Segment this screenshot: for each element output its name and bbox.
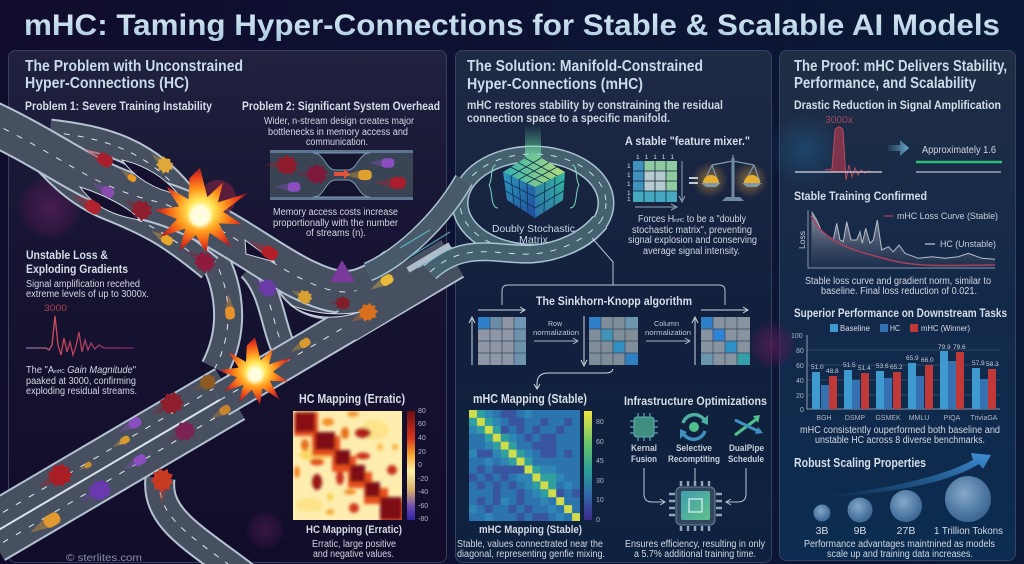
colorbar: mHC: 30 — [596, 478, 604, 485]
caption: mHC mapping: Stable, values connectrated near the — [457, 539, 603, 550]
text: efficiency: Ensures efficiency, resulting in only — [625, 539, 765, 550]
label: selective recomptiting: Recomptiting — [668, 454, 720, 465]
labels: scale: 3B — [816, 525, 828, 537]
colorbar: HC: 20 — [418, 449, 426, 456]
colorbar: HC: -80 — [418, 516, 428, 523]
heading: proof: Performance, and Scalability — [794, 75, 976, 92]
heatmap title: HC: HC Mapping (Erratic) — [299, 392, 405, 406]
colorbar: HC: -40 — [418, 489, 428, 496]
colorbar: HC — [407, 408, 428, 523]
label: doubly stochastic matrix: Doubly Stochastic — [492, 223, 575, 235]
subheading: stable training: Stable Training Confirmed — [794, 189, 927, 203]
text: overhead description: bottlenecks in memory access and — [268, 127, 408, 138]
chart: benchmark bars: 100 — [791, 333, 803, 340]
text: outperformed: mHC consistently ouperformed both baseline and — [800, 425, 1000, 436]
chart: benchmark bars: 58.3 — [986, 361, 999, 368]
chart: benchmark bars: 79.9 — [938, 344, 951, 351]
text: forces matrix: signal explosion and conserving — [628, 235, 757, 246]
explosion upper — [154, 168, 248, 254]
arrow: scaling trend — [818, 453, 991, 497]
road: ring entry — [430, 222, 600, 272]
chart: loss curve: mHC Loss Curve (Stable) — [897, 211, 998, 222]
chart: loss curve: Loss — [797, 231, 807, 249]
label: dualpipe schedule: DualPipe — [729, 443, 764, 454]
text: efficiency: a 5.7% additional training time. — [634, 549, 756, 560]
chart: signal before: 3000x — [825, 115, 853, 126]
caption: mHC mapping: diagonal, representing genfie mixing. — [457, 549, 605, 560]
chart: benchmark bars: 40 — [796, 378, 804, 385]
text: forces matrix: average signal intensity. — [643, 246, 740, 257]
chart: benchmark bars: PIQA — [944, 415, 961, 422]
label: column normalization — [645, 319, 691, 344]
colorbar: mHC: 10 — [596, 497, 604, 504]
text: scaling — [804, 539, 995, 560]
caption: HC mapping: HC Mapping (Erratic) — [306, 524, 402, 536]
icon: central chip — [669, 481, 722, 531]
colorbar: HC: 60 — [418, 421, 426, 428]
text: outperformed — [800, 425, 1000, 446]
chart: loss curve: HC (Unstable) — [940, 239, 996, 250]
road: sweeping arc — [285, 285, 395, 310]
glow: blue orb proof panel — [767, 112, 843, 188]
colorbar: mHC: 80 — [596, 419, 604, 426]
matrix: column normalized — [701, 317, 750, 365]
label: kernal fusion: Kernal — [631, 443, 657, 454]
heading: proof — [794, 58, 1007, 92]
colorbar: HC: 40 — [418, 435, 426, 442]
colorbar: mHC: 0 — [596, 517, 600, 524]
diagram: stochastic matrix: 1 — [627, 181, 631, 188]
watermark: © sterlites.com — [66, 553, 142, 564]
label: selective recomptiting: Selective — [676, 443, 712, 454]
road: lower ramp — [25, 138, 210, 268]
heading: problem — [25, 58, 243, 92]
chart: loss curve — [797, 210, 998, 268]
subheading: unstable loss: Unstable Loss & — [26, 248, 108, 262]
heading: infrastructure: Infrastructure Optimizations — [624, 394, 767, 408]
label: selective recomptiting — [668, 443, 720, 465]
bracket: sinkhorn connector — [502, 238, 725, 305]
label: dualpipe schedule — [728, 443, 764, 465]
text: stable loss: baseline. Final loss reduction of 0.021. — [821, 286, 977, 297]
text: signal amplification — [26, 279, 149, 300]
labels: scale — [816, 525, 1003, 537]
diagram: stochastic matrix: 1 — [627, 172, 631, 179]
chart: benchmark bars: 80 — [796, 348, 804, 355]
labels: scale: 27B — [897, 525, 915, 537]
glow: purple orb left — [17, 175, 83, 241]
caption: HC mapping: Erratic, large positive — [312, 539, 396, 550]
chart: benchmark bars — [791, 333, 1000, 422]
chart: benchmark bars: BGH — [816, 415, 832, 422]
explosion lower — [219, 337, 293, 405]
text: stable loss — [805, 276, 991, 297]
chart: benchmark bars: 79.6 — [953, 344, 966, 351]
text: gain magnitude — [26, 365, 137, 397]
chart: benchmark bars: 51.0 — [811, 364, 824, 371]
caption: HC mapping: and negative values. — [313, 549, 394, 560]
chart: benchmark bars: TriviaGA — [971, 415, 998, 422]
label: kernal fusion: Fusion — [631, 454, 657, 465]
label: doubly stochastic matrix: Matrix — [519, 234, 549, 246]
text: stable loss: Stable loss curve and gradient norm, similar to — [805, 276, 991, 287]
text: forces matrix — [628, 214, 757, 257]
heading: solution — [467, 58, 703, 93]
diagram: stochastic matrix: 1 — [627, 163, 631, 170]
caption: HC mapping — [306, 524, 402, 560]
legend: benchmark bars — [830, 324, 970, 333]
heading: solution: Hyper-Connections (mHC) — [467, 76, 643, 93]
vehicles — [27, 143, 395, 538]
diagram: memory bottleneck — [265, 150, 413, 200]
arrows: to central chip — [644, 468, 746, 505]
label: row normalization: Row — [548, 319, 563, 328]
icon: selective recomputing — [680, 415, 708, 439]
heading: problem: Hyper-Connections (HC) — [25, 75, 189, 92]
road network — [0, 122, 606, 564]
diagram: stochastic matrix: 1 — [627, 196, 631, 203]
panel: proof — [780, 50, 1016, 560]
text: forces matrix: Forces HmHC to be a "doubly — [638, 214, 746, 225]
text: memory costs — [273, 207, 399, 239]
bubbles: scale — [814, 476, 991, 522]
chart: benchmark bars: 65.2 — [890, 364, 903, 371]
label: row normalization: normalization — [533, 328, 579, 337]
text: solution intro: mHC restores stability by constraining the residual — [467, 100, 723, 112]
text: efficiency — [625, 539, 765, 560]
text: scaling: scale up and training data increases. — [827, 549, 973, 560]
heading: solution: The Solution: Manifold-Constrained — [467, 58, 703, 75]
glow: purple orb boundary — [748, 321, 796, 369]
subheading: unstable loss — [26, 248, 128, 276]
subheading: problem 1: Problem 1: Severe Training Instability — [25, 99, 212, 113]
matrix: row normalized — [589, 317, 638, 365]
road: upper highway — [0, 122, 398, 292]
road: lower exit — [160, 478, 262, 564]
title: mHC: Taming Hyper-Connections for Stable & Scalable AI Models — [24, 9, 1000, 42]
colorbar: HC: -20 — [418, 476, 428, 483]
text: overhead description: communication. — [306, 137, 368, 148]
chart: benchmark bars: 53.6 — [876, 363, 889, 370]
subheading: feature mixer: A stable "feature mixer." — [625, 134, 750, 148]
text: memory costs: of streams (n). — [306, 228, 366, 239]
text: memory costs: Memory access costs increase — [273, 207, 398, 218]
caption: mHC mapping: mHC Mapping (Stable) — [479, 524, 582, 536]
matrix: initial — [478, 317, 526, 365]
legend: benchmark bars: HC — [890, 324, 900, 333]
chart: benchmark bars: 66.0 — [921, 357, 934, 364]
label: column normalization: normalization — [645, 328, 691, 337]
label: dualpipe schedule: Schedule — [728, 454, 764, 465]
colorbar: HC: -60 — [418, 503, 428, 510]
diagram: stochastic matrix: 11111 — [636, 154, 674, 161]
chart: signal before — [795, 115, 882, 180]
text: scaling: Performance advantages maintnined as models — [804, 539, 995, 550]
label: column normalization: Column — [654, 319, 679, 328]
chart: benchmark bars: 57.9 — [972, 360, 985, 367]
road: curved branch one — [205, 245, 228, 368]
chart: benchmark bars: 51.4 — [858, 365, 871, 372]
chart: benchmark bars: 60 — [796, 363, 804, 370]
chart: gain spike — [26, 303, 134, 355]
legend: benchmark bars: mHC (Winner) — [921, 324, 970, 333]
arrows: normalization axes — [469, 307, 748, 366]
diagram: stochastic matrix — [627, 154, 698, 210]
text: outperformed: unstable HC across 8 diverse benchmarks. — [815, 435, 985, 446]
text: overhead description: Wider, n-stream design creates major — [264, 116, 415, 127]
road: teal light streaks — [400, 230, 452, 268]
chart: benchmark bars: GSMEK — [875, 415, 901, 422]
road: curved branch two — [250, 268, 285, 352]
icon: balance scale — [692, 155, 768, 201]
heading: problem: The Problem with Unconstrained — [25, 58, 243, 75]
text: solution intro: connection space to a specific manifold. — [467, 113, 670, 125]
glow: purple orb centre — [245, 510, 285, 550]
labels: scale: 9B — [854, 525, 866, 537]
chart: signal after: Approximately 1.6 — [922, 145, 996, 156]
label: doubly stochastic matrix — [492, 223, 575, 246]
text: solution intro — [467, 100, 723, 125]
icon: matrix cube — [489, 125, 579, 218]
text: memory costs: proportionally with the number — [273, 218, 399, 229]
label: kernal fusion — [631, 443, 657, 465]
road: upper ramp — [50, 132, 190, 205]
subheading: signal amplification: Drastic Reduction in Signal Amplification — [794, 98, 1001, 112]
text: forces matrix: stochastic matrix", preventing — [632, 225, 752, 236]
colorbar: mHC — [584, 411, 604, 524]
road: approach band — [345, 258, 452, 322]
subheading: unstable loss: Exploding Gradients — [26, 262, 128, 276]
chart: benchmark bars: 65.9 — [906, 355, 919, 362]
subheading: problem 2: Problem 2: Significant System Overhead — [242, 99, 440, 113]
road: metro train — [408, 245, 450, 270]
colorbar: mHC: 60 — [596, 439, 604, 446]
chart: benchmark bars: 48.8 — [826, 368, 839, 375]
text: gain magnitude: The "AmHC Gain Magnitude" — [26, 365, 136, 376]
heading: sinkhorn knopp: The Sinkhorn-Knopp algorithm — [536, 294, 692, 308]
chart: benchmark bars: 20 — [796, 393, 804, 400]
road: interchange islands — [80, 160, 360, 317]
legend: benchmark bars: Baseline — [840, 324, 871, 333]
chart: benchmark bars: 51.5 — [843, 362, 856, 369]
caption: mHC mapping — [457, 524, 605, 560]
text: gain magnitude: paaked at 3000, confirming — [26, 376, 136, 387]
text: signal amplification: Signal amplification recehed — [26, 279, 140, 290]
colorbar: mHC: 45 — [596, 458, 604, 465]
arrow: to mHC mapping — [534, 369, 613, 389]
chart: benchmark bars: MMLU — [909, 415, 929, 422]
colorbar: HC: 0 — [418, 462, 422, 469]
heatmap: mHC stable — [469, 410, 580, 521]
heatmap title: mHC: mHC Mapping (Stable) — [473, 392, 587, 406]
icon: dualpipe — [735, 415, 763, 435]
colorbar: HC: 80 — [418, 408, 426, 415]
arrow: reduction — [888, 140, 909, 156]
chart: benchmark bars: 0 — [800, 407, 804, 414]
chart: signal after — [916, 145, 1002, 172]
diagram: stochastic matrix: 1 — [627, 190, 631, 197]
road: ring around matrix — [460, 154, 606, 252]
icon: kernel fusion chip — [630, 413, 658, 441]
panel: problem — [8, 50, 446, 562]
label: row normalization — [533, 319, 579, 344]
panel: solution — [456, 50, 772, 562]
road: diagonal highway — [0, 262, 455, 550]
chart: gain spike: 3000 — [44, 303, 67, 314]
heatmap: HC erratic — [293, 411, 404, 522]
text: signal amplification: extreme levels of up to 3000x. — [26, 289, 149, 300]
subheading: robust scaling: Robust Scaling Properties — [794, 456, 926, 470]
labels: scale: 1 Trillion Tokons — [934, 525, 1003, 537]
road: ring arm — [368, 180, 464, 272]
text: gain magnitude: exploding residual streams. — [26, 386, 137, 397]
text: overhead description — [264, 116, 415, 148]
chart: benchmark bars: DSMP — [845, 415, 865, 422]
